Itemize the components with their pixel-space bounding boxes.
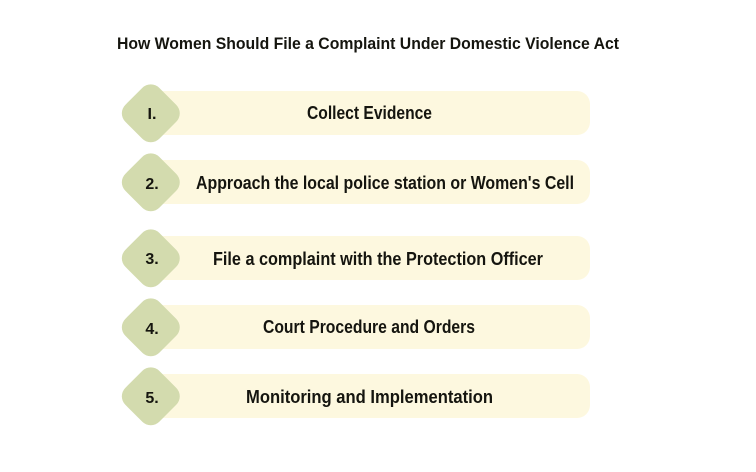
- step 3 number: 3.: [145, 251, 159, 268]
- step 2: [117, 148, 590, 216]
- step 3 diamond: [117, 224, 185, 292]
- step 1: [117, 79, 590, 147]
- step 5: [117, 362, 590, 430]
- step 1 label: Collect Evidence: [307, 103, 432, 123]
- step 5 number: 5.: [145, 390, 159, 407]
- step 3 bar: [150, 236, 590, 280]
- step 5 bar: [150, 374, 590, 418]
- step 5 label: Monitoring and Implementation: [246, 387, 493, 407]
- step 2 number: 2.: [145, 176, 159, 193]
- step 4 bar: [150, 305, 590, 349]
- step 2 label: Approach the local police station or Women's Cell: [196, 173, 574, 193]
- step 1 number: I.: [148, 106, 156, 123]
- step 1 bar: [150, 91, 590, 135]
- title: How Women Should File a Complaint Under Domestic Violence Act: [117, 34, 619, 53]
- step 2 diamond: [117, 148, 185, 216]
- step 2 bar: [150, 160, 590, 204]
- step 4 number: 4.: [145, 321, 159, 338]
- step 1 diamond: [117, 79, 185, 147]
- step 4 diamond: [117, 293, 185, 361]
- step 4: [117, 293, 590, 361]
- step 4 label: Court Procedure and Orders: [263, 317, 475, 337]
- step 3: [117, 224, 590, 292]
- step 3 label: File a complaint with the Protection Officer: [213, 249, 543, 269]
- step 5 diamond: [117, 362, 185, 430]
